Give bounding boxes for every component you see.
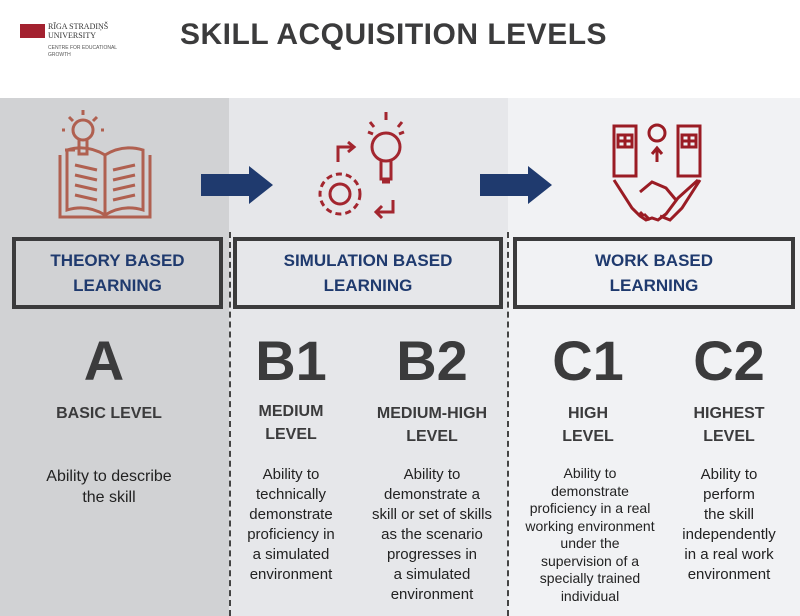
text: Ability to [701, 466, 757, 483]
text: the skill [704, 506, 754, 523]
box: simulation [233, 237, 503, 309]
text: Ability to [564, 465, 616, 481]
logo: RĪGA STRADIŅŠ [48, 22, 108, 31]
text: skill or set of skills [372, 506, 492, 523]
background column: theory [0, 98, 229, 616]
text: environment [688, 566, 770, 583]
arrow 1 [201, 166, 273, 204]
level C2: C2 [693, 329, 765, 392]
text: supervision of a [541, 552, 639, 568]
arrow 2 [480, 166, 552, 204]
box: work: WORK BASED [595, 251, 713, 270]
text: a simulated [253, 546, 329, 563]
text: under the [560, 535, 620, 551]
text: progresses in [387, 546, 477, 563]
text: demonstrate [249, 506, 333, 523]
text: as the scenario [381, 526, 483, 543]
text: environment [250, 566, 332, 583]
text: MEDIUM [259, 403, 323, 420]
text: LEVEL [703, 428, 755, 445]
box: simulation: LEARNING [324, 276, 412, 295]
background column: simulation [229, 98, 508, 616]
box: theory: THEORY BASED [50, 251, 185, 270]
text: a simulated [394, 566, 470, 583]
logo: CENTRE FOR EDUCATIONAL [48, 45, 117, 51]
text: perform [703, 486, 755, 503]
logo: GROWTH [48, 52, 71, 58]
text: Ability to [263, 466, 319, 483]
text: LEVEL [265, 426, 317, 443]
text: proficiency in [247, 526, 335, 543]
level C1: C1 [552, 329, 624, 392]
text: Ability to [404, 466, 460, 483]
text: working environment [525, 518, 655, 534]
text: environment [391, 586, 473, 603]
text: specially trained [540, 570, 640, 586]
text: Ability to describe [46, 468, 172, 485]
box: theory: LEARNING [73, 276, 162, 295]
box: theory [12, 237, 223, 309]
text: MEDIUM-HIGH [377, 405, 487, 422]
box: simulation: SIMULATION BASED [284, 251, 452, 270]
icon: gear and bulb [318, 112, 404, 219]
text: BASIC LEVEL [56, 405, 162, 422]
text: the skill [82, 489, 136, 506]
text: HIGHEST [693, 405, 765, 422]
background column: work [508, 98, 800, 616]
text: demonstrate a [384, 486, 480, 503]
level B2: B2 [396, 329, 468, 392]
title: SKILL ACQUISITION LEVELS [180, 18, 607, 51]
text: individual [561, 588, 619, 604]
text: HIGH [568, 405, 608, 422]
text: LEVEL [562, 428, 614, 445]
level A: A [84, 329, 124, 392]
text: technically [256, 486, 326, 503]
icon: book with bulb [58, 110, 152, 218]
text: demonstrate [551, 482, 629, 498]
text: independently [682, 526, 776, 543]
icon: handshake buildings [612, 124, 702, 222]
box: work [513, 237, 795, 309]
box: work: LEARNING [610, 276, 698, 295]
logo [20, 22, 117, 58]
text: proficiency in a real [530, 500, 650, 516]
text: LEVEL [406, 428, 458, 445]
logo: UNIVERSITY [48, 31, 96, 40]
text: in a real work [684, 546, 774, 563]
level B1: B1 [255, 329, 327, 392]
